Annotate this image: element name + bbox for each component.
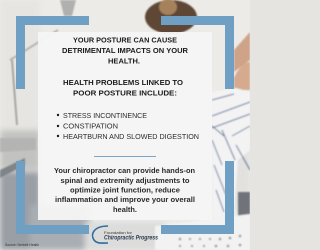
shirt — [212, 88, 250, 218]
paragraph: chiropractor: health. — [113, 205, 137, 214]
paragraph: chiropractor: inflammation and improve your overall — [55, 195, 195, 204]
paragraph: chiropractor: spinal and extremity adjustments to — [60, 176, 190, 185]
content panel — [38, 32, 212, 220]
logo: Foundation for Chiropractic Progress: Foundation for — [104, 231, 133, 235]
subheading: health problems: POOR POSTURE INCLUDE: — [73, 88, 177, 98]
bullet list: STRESS INCONTINENCE — [63, 111, 147, 120]
heading: posture impacts: DETRIMENTAL IMPACTS ON YOUR — [62, 46, 189, 55]
paragraph: chiropractor: optimize joint function, reduce — [70, 186, 180, 194]
heading: posture impacts: YOUR POSTURE CAN CAUSE — [73, 36, 177, 44]
heading: posture impacts: HEALTH. — [108, 56, 140, 66]
basket — [155, 214, 250, 250]
logo: Foundation for Chiropractic Progress: Chiropractic Progress — [104, 236, 159, 242]
logo: Foundation for Chiropractic Progress — [93, 226, 159, 243]
subheading: health problems — [63, 78, 183, 98]
source credit: Source: Nerbelt Health — [5, 243, 39, 247]
bullet list — [57, 111, 199, 141]
hair — [145, 0, 197, 34]
paragraph: chiropractor: Your chiropractor can provide hands-on — [54, 166, 195, 175]
heading: posture impacts — [62, 36, 189, 66]
paragraph: chiropractor — [54, 166, 195, 214]
bullet list: HEARTBURN AND SLOWED DIGESTION — [63, 132, 199, 141]
bullet list: CONSTIPATION — [63, 122, 118, 130]
corner brackets — [16, 16, 234, 234]
subheading: health problems: HEALTH PROBLEMS LINKED TO — [63, 78, 183, 87]
background photo — [0, 0, 250, 250]
arm — [234, 32, 250, 72]
